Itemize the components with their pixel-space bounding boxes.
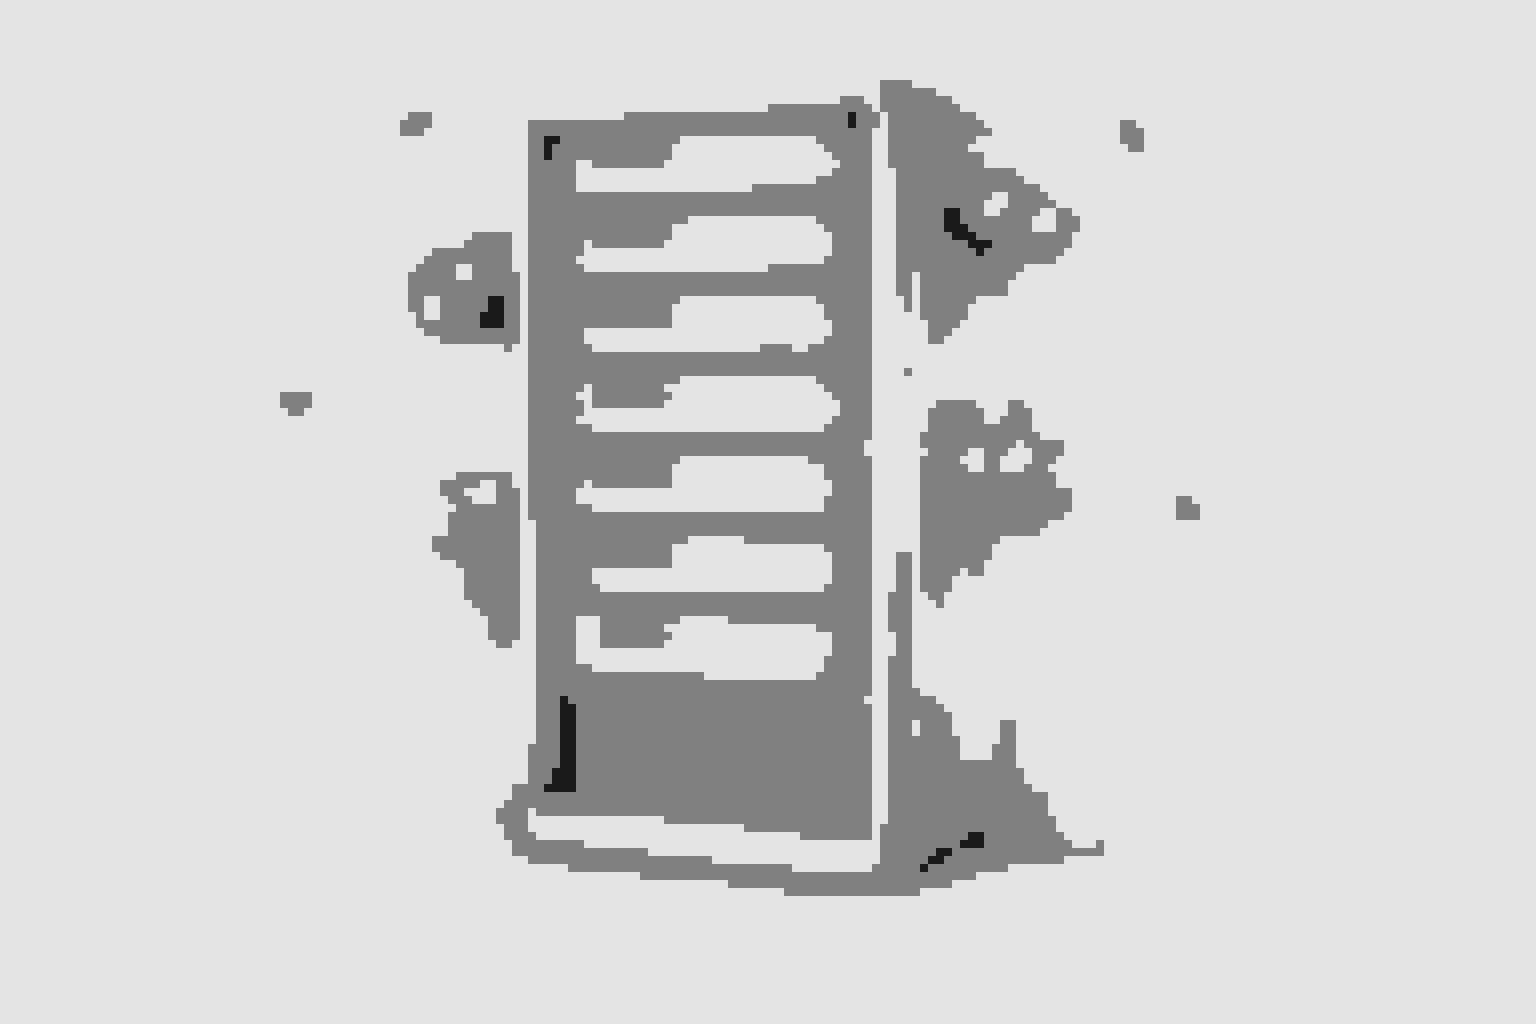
hole left [960,448,984,472]
dark bar lower left [544,696,576,792]
panel: upper right shape [880,80,1080,344]
hole left [984,192,1008,216]
hole top [456,264,472,280]
base strip [528,808,872,872]
row 4 [576,376,840,432]
side notches [864,440,872,704]
panel: middle right shape [920,400,1072,608]
fragment: mid left [280,392,312,416]
fragment: center dot [904,368,912,376]
hole left [424,296,440,320]
panel: left lower shape [432,472,520,648]
dark stroke left [920,848,952,872]
panel: central column [496,96,880,896]
row 5 [576,456,832,512]
row 7 [576,616,832,680]
fragment: mid right [1176,496,1200,520]
row 6 [592,536,832,592]
row 3 [584,296,832,352]
hole right [1032,208,1056,232]
row 2 [576,216,832,272]
panel: lower right shape [860,552,1104,896]
hole [912,720,920,736]
dark curve [944,208,992,256]
fragment: top right [1120,120,1144,152]
fragment: top left [400,112,432,136]
hole right [1000,440,1032,472]
dark stroke right [960,832,984,848]
hole [464,480,496,504]
row 1 [576,136,840,192]
panel: left round shape [408,232,520,352]
dark corner top left [544,136,560,160]
dark patch [480,296,504,328]
dark corner top right [848,112,856,128]
